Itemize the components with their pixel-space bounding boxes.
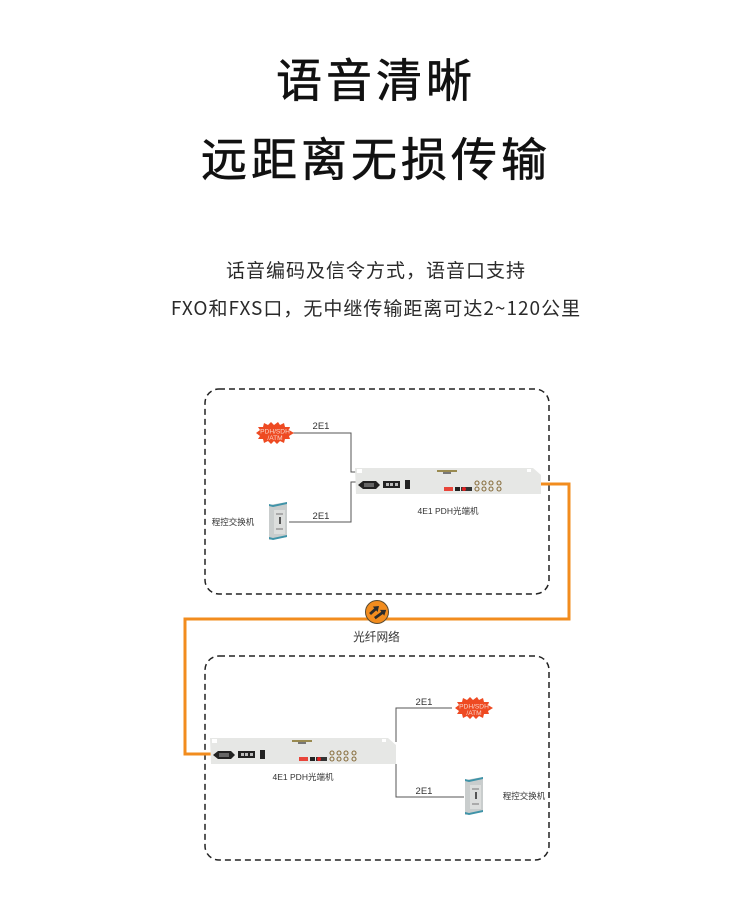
panel: bottom site (205, 656, 549, 860)
terminal block (238, 751, 255, 758)
device: bottom PDH terminal (210, 738, 396, 764)
label: exchange top: 程控交换机 (212, 517, 255, 527)
subtitle line 2: FXO和FXS口，无中继传输距离可达2~120公里 (171, 294, 581, 321)
icon: exchange cabinet bottom (465, 777, 483, 815)
device: top PDH terminal (355, 468, 541, 494)
icon: PDH/SDH cloud bottom (455, 697, 493, 719)
label: fibre network: 光纤网络 (353, 630, 400, 644)
label: 2E1 lower: 2E1 (313, 511, 329, 522)
logo (437, 470, 457, 472)
subtitle line 1: 话音编码及信令方式，语音口支持 (226, 256, 526, 283)
red DIP, RJ45 and fibre ports (444, 487, 453, 491)
icon: PDH/SDH cloud top: PDH/SDH (260, 428, 290, 436)
icon: PDH/SDH cloud top (256, 422, 294, 444)
icon: PDH/SDH cloud bottom: /ATM (466, 710, 482, 717)
switch (405, 480, 410, 489)
orange fibre link (185, 484, 569, 754)
BNC connectors (475, 481, 501, 491)
logo (292, 740, 312, 742)
icon: PDH/SDH cloud top: /ATM (267, 435, 283, 442)
label: 2E1 bottom lower: 2E1 (416, 786, 432, 797)
top links (289, 433, 356, 522)
title line 2: 远距离无损传输 (201, 124, 551, 190)
label: exchange bottom: 程控交换机 (503, 791, 546, 801)
bottom links (396, 708, 464, 797)
icon: exchange cabinet top (269, 502, 287, 540)
panel: top site (205, 389, 549, 594)
label: bottom terminal: 4E1 PDH光端机 (273, 772, 334, 782)
power socket (213, 751, 235, 759)
icon: PDH/SDH cloud bottom: PDH/SDH (459, 704, 489, 710)
title line 1: 语音清晰 (276, 45, 476, 111)
label: 2E1 upper: 2E1 (313, 421, 329, 432)
power socket (358, 481, 380, 489)
switch (260, 750, 265, 759)
terminal block (383, 481, 400, 488)
icon: fibre network badge (366, 600, 388, 624)
label: 2E1 bottom upper: 2E1 (416, 697, 432, 708)
red DIP, RJ45 and fibre ports (299, 757, 308, 761)
label: top terminal: 4E1 PDH光端机 (418, 506, 479, 516)
BNC connectors (330, 751, 356, 761)
